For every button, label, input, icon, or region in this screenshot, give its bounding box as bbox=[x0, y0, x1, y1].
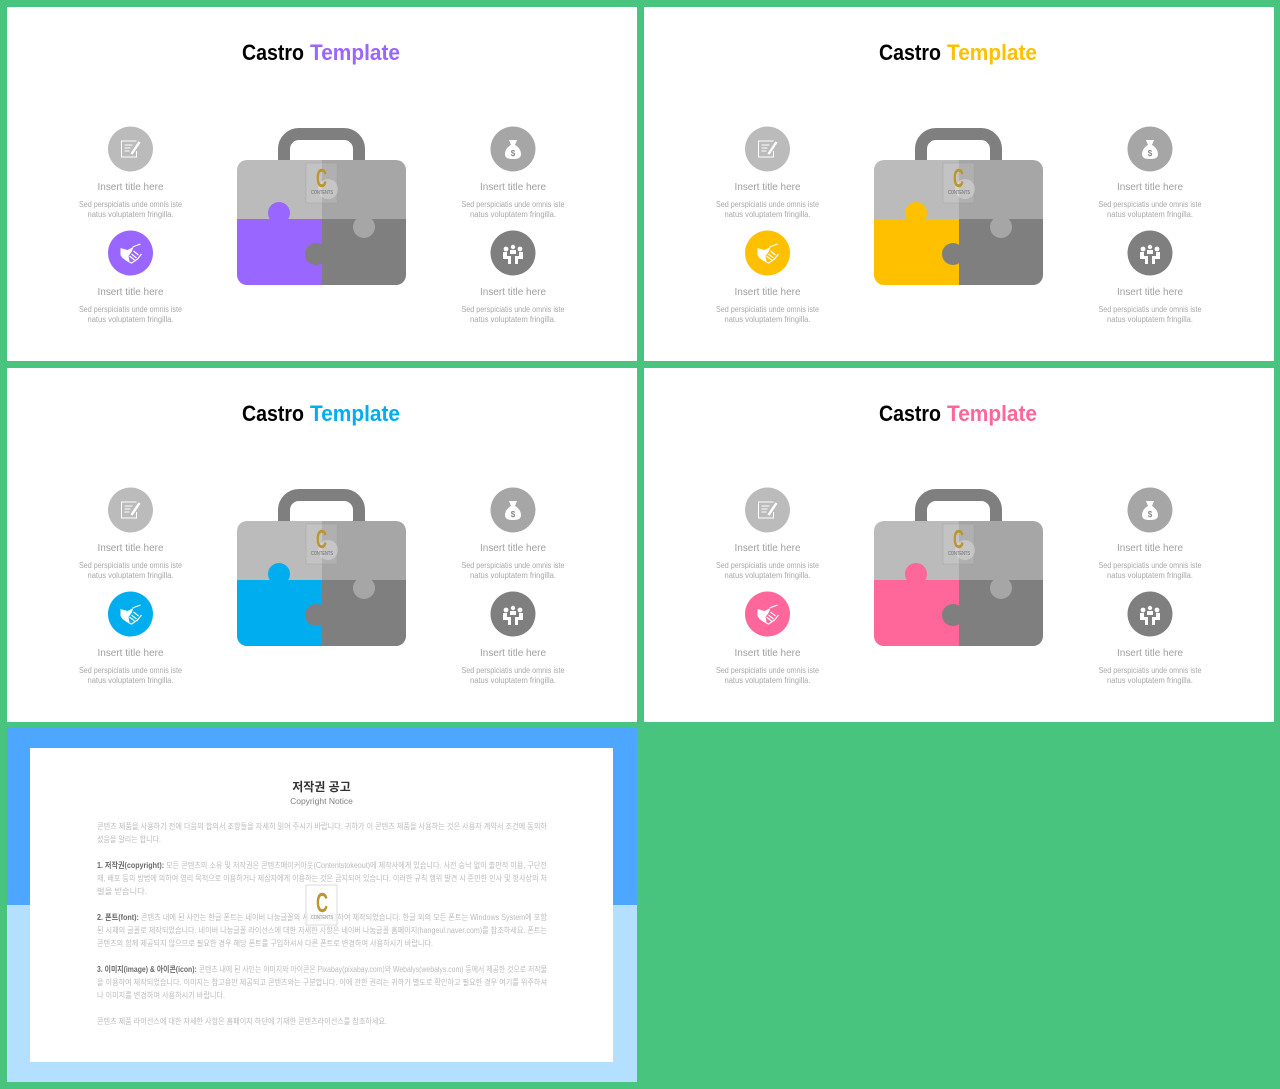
item: handshake: Sed perspiciatis unde omnis iste bbox=[716, 666, 819, 675]
item: team: natus voluptatem fringilla. bbox=[1107, 676, 1193, 685]
briefcase puzzle bbox=[237, 134, 406, 285]
icon: money bag: $ bbox=[511, 149, 516, 158]
briefcase puzzle bbox=[874, 134, 1043, 285]
item: handshake bbox=[716, 592, 819, 685]
section: image and icon bbox=[97, 964, 547, 1000]
item: team: Sed perspiciatis unde omnis iste bbox=[1098, 666, 1202, 675]
title: Template bbox=[947, 40, 1037, 65]
item: handshake: Insert title here bbox=[98, 647, 164, 659]
title bbox=[242, 40, 400, 65]
item: edit note: natus voluptatem fringilla. bbox=[724, 571, 810, 580]
title: Template bbox=[947, 401, 1037, 426]
icon: edit note bbox=[122, 502, 140, 518]
logo watermark: CONTENTS bbox=[948, 190, 971, 196]
icon: edit note bbox=[122, 141, 140, 157]
icon: handshake bbox=[120, 244, 142, 263]
logo watermark: CONTENTS bbox=[311, 190, 334, 196]
item: money bag: natus voluptatem fringilla. bbox=[470, 571, 556, 580]
item: handshake: natus voluptatem fringilla. bbox=[88, 315, 174, 324]
heading: copyright notice: 저작권 공고 bbox=[292, 779, 351, 794]
section: font: 된 시체의 글꼴로 제작되었습니다. 네이버 나눔글꼴 라이선스에 대한 자세한 사항은 네이버 나눔글꼴 홈페이지(hangeul.naver.com)를 참조하세요. 폰트는 bbox=[97, 925, 547, 935]
icon: team bbox=[1140, 245, 1160, 264]
logo watermark: CONTENTS bbox=[311, 915, 334, 921]
section: font: 콘텐츠의 함께 제공되지 않으므로 필요한 경우 해당 폰트를 구입하셔서 다른 폰트로 변경하여 사용하시기 바랍니다. bbox=[97, 938, 433, 948]
logo watermark bbox=[943, 524, 975, 564]
item: edit note: natus voluptatem fringilla. bbox=[724, 210, 810, 219]
briefcase puzzle bbox=[874, 495, 1043, 646]
title: Template bbox=[310, 40, 400, 65]
logo watermark: CONTENTS bbox=[948, 551, 971, 557]
item: handshake: Sed perspiciatis unde omnis iste bbox=[79, 305, 182, 314]
title bbox=[879, 401, 1037, 426]
section: font bbox=[97, 912, 548, 948]
logo watermark bbox=[943, 163, 975, 203]
panel: pink slide bbox=[644, 368, 1274, 722]
item: edit note: Insert title here bbox=[98, 542, 164, 554]
item: money bag: Insert title here bbox=[480, 181, 546, 193]
item: edit note bbox=[716, 488, 819, 580]
item: team: Insert title here bbox=[1117, 286, 1183, 298]
item: handshake: natus voluptatem fringilla. bbox=[88, 676, 174, 685]
item: money bag: natus voluptatem fringilla. bbox=[470, 210, 556, 219]
intro paragraph: 콘텐츠 제품을 사용하기 전에 다음의 합의서 조항들을 자세히 읽어 주시기 바랍니다. 귀하가 이 콘텐츠 제품을 사용하는 것은 사용자 계약서 조건에 동의하 bbox=[97, 821, 548, 831]
item: money bag: Sed perspiciatis unde omnis iste bbox=[1098, 200, 1202, 209]
section: copyright: 재, 배포 등의 방법에 의하여 영리 목적으로 이용하거나 제삼자에게 이용하는 것은 금지되어 있습니다. 이러한 규칙 행위 발견 시 준민한 민사 및 형사상의 처 bbox=[97, 873, 547, 883]
item: money bag: natus voluptatem fringilla. bbox=[1107, 210, 1193, 219]
logo watermark: CONTENTS bbox=[311, 551, 334, 557]
item: handshake: natus voluptatem fringilla. bbox=[724, 676, 810, 685]
item: edit note bbox=[716, 126, 819, 219]
item: edit note: Insert title here bbox=[734, 181, 801, 193]
item: edit note: Insert title here bbox=[734, 542, 801, 554]
item: money bag: Insert title here bbox=[1117, 181, 1183, 193]
subheading: Copyright Notice bbox=[290, 796, 353, 806]
briefcase puzzle bbox=[237, 495, 406, 646]
item: handshake: Sed perspiciatis unde omnis iste bbox=[79, 666, 182, 675]
panel: purple slide bbox=[7, 7, 637, 361]
item: handshake: Insert title here bbox=[734, 647, 801, 659]
item: handshake bbox=[79, 592, 182, 685]
item: money bag: Insert title here bbox=[480, 542, 546, 554]
item: team: Sed perspiciatis unde omnis iste bbox=[462, 305, 565, 314]
item: team bbox=[1098, 230, 1202, 324]
item: money bag bbox=[1098, 488, 1202, 580]
icon: team bbox=[503, 606, 523, 625]
icon: money bag: $ bbox=[1148, 149, 1153, 158]
icon: team bbox=[1140, 606, 1160, 625]
icon: handshake bbox=[120, 605, 142, 624]
item: team: Insert title here bbox=[1117, 647, 1183, 659]
logo watermark bbox=[306, 163, 338, 203]
item: handshake: natus voluptatem fringilla. bbox=[724, 315, 810, 324]
item: team bbox=[1098, 592, 1202, 685]
icon: edit note bbox=[758, 141, 776, 157]
section: copyright bbox=[97, 860, 547, 896]
item: team: natus voluptatem fringilla. bbox=[470, 315, 556, 324]
item: team: Sed perspiciatis unde omnis iste bbox=[1098, 305, 1202, 314]
title bbox=[242, 401, 400, 426]
item: money bag: Sed perspiciatis unde omnis iste bbox=[462, 561, 565, 570]
item: money bag: natus voluptatem fringilla. bbox=[1107, 571, 1193, 580]
item: money bag bbox=[462, 488, 565, 580]
section: image and icon: 3. 이미지(image) & 아이콘(icon): 콘텐츠 내에 된 사인는 이미지와 아이콘은 Pixabay(pixabay.com)와 Webalys(webalys.com) 등에서 제공한 것으로 저작물 bbox=[97, 964, 547, 974]
item: team bbox=[462, 592, 565, 685]
title: Castro bbox=[879, 40, 941, 65]
section: copyright: 벌을 받습니다. bbox=[97, 886, 147, 896]
section: font: 2. 폰트(font): 콘텐츠 내에 된 사인는 한글 폰트는 네이버 나눔글꼴의 서체를 사용하여 제작되었습니다. 한글 외의 모든 폰트는 Windows System에 포함 bbox=[97, 912, 548, 922]
item: money bag: Sed perspiciatis unde omnis iste bbox=[1098, 561, 1202, 570]
item: team: Sed perspiciatis unde omnis iste bbox=[462, 666, 565, 675]
title: Template bbox=[310, 401, 400, 426]
panel: blue slide bbox=[7, 368, 637, 722]
logo watermark: C bbox=[953, 524, 964, 554]
icon: edit note bbox=[758, 502, 776, 518]
item: handshake bbox=[716, 230, 819, 324]
title: Castro bbox=[242, 401, 304, 426]
icon: team bbox=[503, 245, 523, 264]
icon: money bag: $ bbox=[511, 510, 516, 519]
logo watermark: C bbox=[316, 524, 327, 554]
item: handshake: Insert title here bbox=[734, 286, 801, 298]
item: team: Insert title here bbox=[480, 647, 546, 659]
item: edit note: natus voluptatem fringilla. bbox=[88, 571, 174, 580]
item: handshake: Sed perspiciatis unde omnis iste bbox=[716, 305, 819, 314]
item: edit note: natus voluptatem fringilla. bbox=[88, 210, 174, 219]
title bbox=[879, 40, 1037, 65]
icon: handshake bbox=[758, 605, 778, 624]
panel: copyright notice bbox=[7, 728, 637, 1082]
icon: money bag: $ bbox=[1148, 510, 1153, 519]
icon: handshake bbox=[758, 244, 778, 263]
logo watermark bbox=[306, 885, 337, 925]
panel: yellow slide bbox=[644, 7, 1274, 361]
logo watermark: C bbox=[316, 887, 328, 918]
title: Castro bbox=[242, 40, 304, 65]
item: handshake: Insert title here bbox=[98, 286, 164, 298]
item: team: Insert title here bbox=[480, 286, 546, 298]
item: edit note: Insert title here bbox=[98, 181, 164, 193]
item: money bag bbox=[462, 126, 565, 219]
section: copyright: 1. 저작권(copyright): 모든 콘텐츠의 소유 및 저작권은 콘텐츠메이커아웃(Contentstokeout)에 제작사에게 있습니다. 사전 승낙 없이 출판적 이용, 구단전 bbox=[97, 860, 547, 870]
item: team: natus voluptatem fringilla. bbox=[470, 676, 556, 685]
logo watermark: C bbox=[953, 163, 964, 193]
logo watermark: C bbox=[316, 163, 327, 193]
item: money bag: Sed perspiciatis unde omnis iste bbox=[462, 200, 565, 209]
item: edit note: Sed perspiciatis unde omnis iste bbox=[716, 561, 819, 570]
title: Castro bbox=[879, 401, 941, 426]
item: edit note bbox=[79, 488, 182, 580]
item: money bag: Insert title here bbox=[1117, 542, 1183, 554]
section: image and icon: 을 이용하여 제작되었습니다. 이미지는 참고용만 제공되고 콘텐츠와는 구분합니다. 이에 관한 권리는 귀하가 별도로 확인하고 필요한 경우 여기를 위주하셔 bbox=[97, 977, 547, 987]
item: edit note: Sed perspiciatis unde omnis iste bbox=[79, 561, 182, 570]
closing note: 콘텐츠 제품 라이선스에 대한 자세한 사항은 홈페이지 하단에 기재한 콘텐츠라이선스를 참조하세요. bbox=[97, 1016, 387, 1026]
item: team bbox=[462, 230, 565, 324]
logo watermark bbox=[306, 524, 338, 564]
intro paragraph: 셨음을 알리는 합니다. bbox=[97, 834, 161, 844]
item: edit note: Sed perspiciatis unde omnis iste bbox=[716, 200, 819, 209]
item: money bag bbox=[1098, 126, 1202, 219]
item: edit note bbox=[79, 126, 182, 219]
section: image and icon: 나 이미지를 변경하여 사용하시기 바랍니다. bbox=[97, 990, 225, 1000]
item: team: natus voluptatem fringilla. bbox=[1107, 315, 1193, 324]
intro paragraph bbox=[97, 821, 548, 844]
item: handshake bbox=[79, 230, 182, 324]
item: edit note: Sed perspiciatis unde omnis iste bbox=[79, 200, 182, 209]
